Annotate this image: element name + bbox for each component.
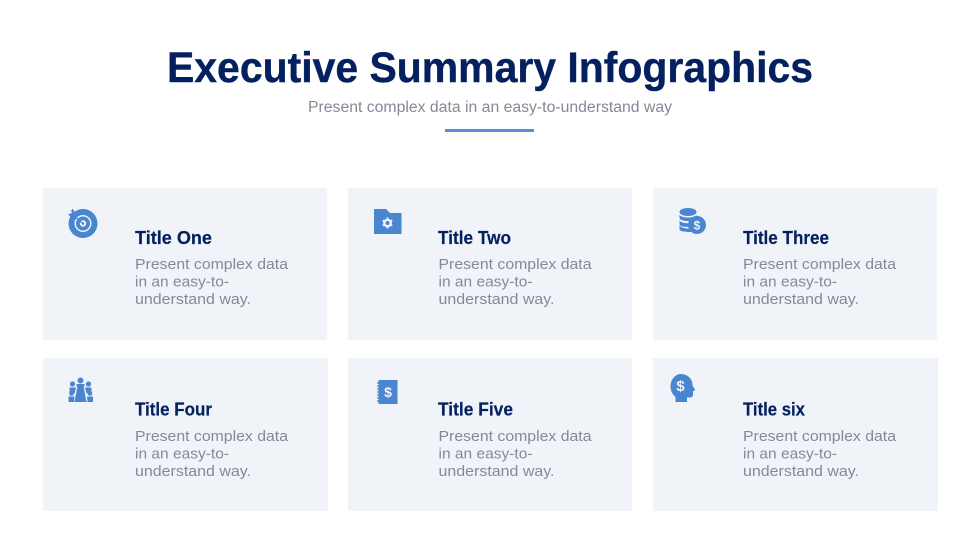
title: Executive Summary Infographics xyxy=(167,44,813,92)
text block: title six: understand way. xyxy=(743,463,859,480)
text block: title five: in an easy-to- xyxy=(438,446,532,462)
text block: title one: in an easy-to- xyxy=(135,274,229,290)
icon: notebook with dollar: $ xyxy=(384,384,392,400)
text block: title four: in an easy-to- xyxy=(135,446,229,462)
text block: title four: understand way. xyxy=(135,463,251,480)
heading: title one: Title One xyxy=(135,227,212,248)
icon: head with dollar: $ xyxy=(676,378,685,395)
text block: title one: Present complex data xyxy=(135,256,289,273)
subtitle: Present complex data in an easy-to-understand way xyxy=(308,99,672,116)
text block: title one: understand way. xyxy=(135,291,251,308)
text block: title five: understand way. xyxy=(438,463,554,480)
text block: title three: understand way. xyxy=(743,291,859,308)
icon: notebook with dollar xyxy=(377,380,398,404)
panel: title two xyxy=(348,188,632,340)
icon: coins with dollar xyxy=(680,208,706,234)
text block: title three: Present complex data xyxy=(743,256,897,273)
icon: target with darts xyxy=(68,208,98,238)
heading: title six: Title six xyxy=(743,398,806,420)
panel: title six xyxy=(653,358,938,511)
panel: title one xyxy=(43,188,327,340)
panel: title four xyxy=(43,358,328,511)
text block: title six: Present complex data xyxy=(743,428,897,445)
icon: head with dollar xyxy=(670,374,695,402)
panel: title five xyxy=(348,358,632,511)
panel: title three xyxy=(653,188,937,340)
heading: title two: Title Two xyxy=(438,227,511,248)
text block: title two: in an easy-to- xyxy=(438,274,532,290)
icon: meeting table with people xyxy=(68,378,93,402)
text block: title three: in an easy-to- xyxy=(743,274,837,290)
text block: title five: Present complex data xyxy=(438,428,592,445)
text block: title four: Present complex data xyxy=(135,428,289,445)
text block: title two: Present complex data xyxy=(438,256,592,273)
text block: title two: understand way. xyxy=(438,291,554,308)
icon: coins with dollar: $ xyxy=(694,218,701,232)
heading: title five: Title Five xyxy=(438,398,513,420)
heading: title four: Title Four xyxy=(135,398,212,420)
text block: title six: in an easy-to- xyxy=(743,446,837,462)
title underline accent xyxy=(445,129,534,132)
heading: title three: Title Three xyxy=(743,227,829,248)
icon: folder with gear xyxy=(374,209,402,234)
